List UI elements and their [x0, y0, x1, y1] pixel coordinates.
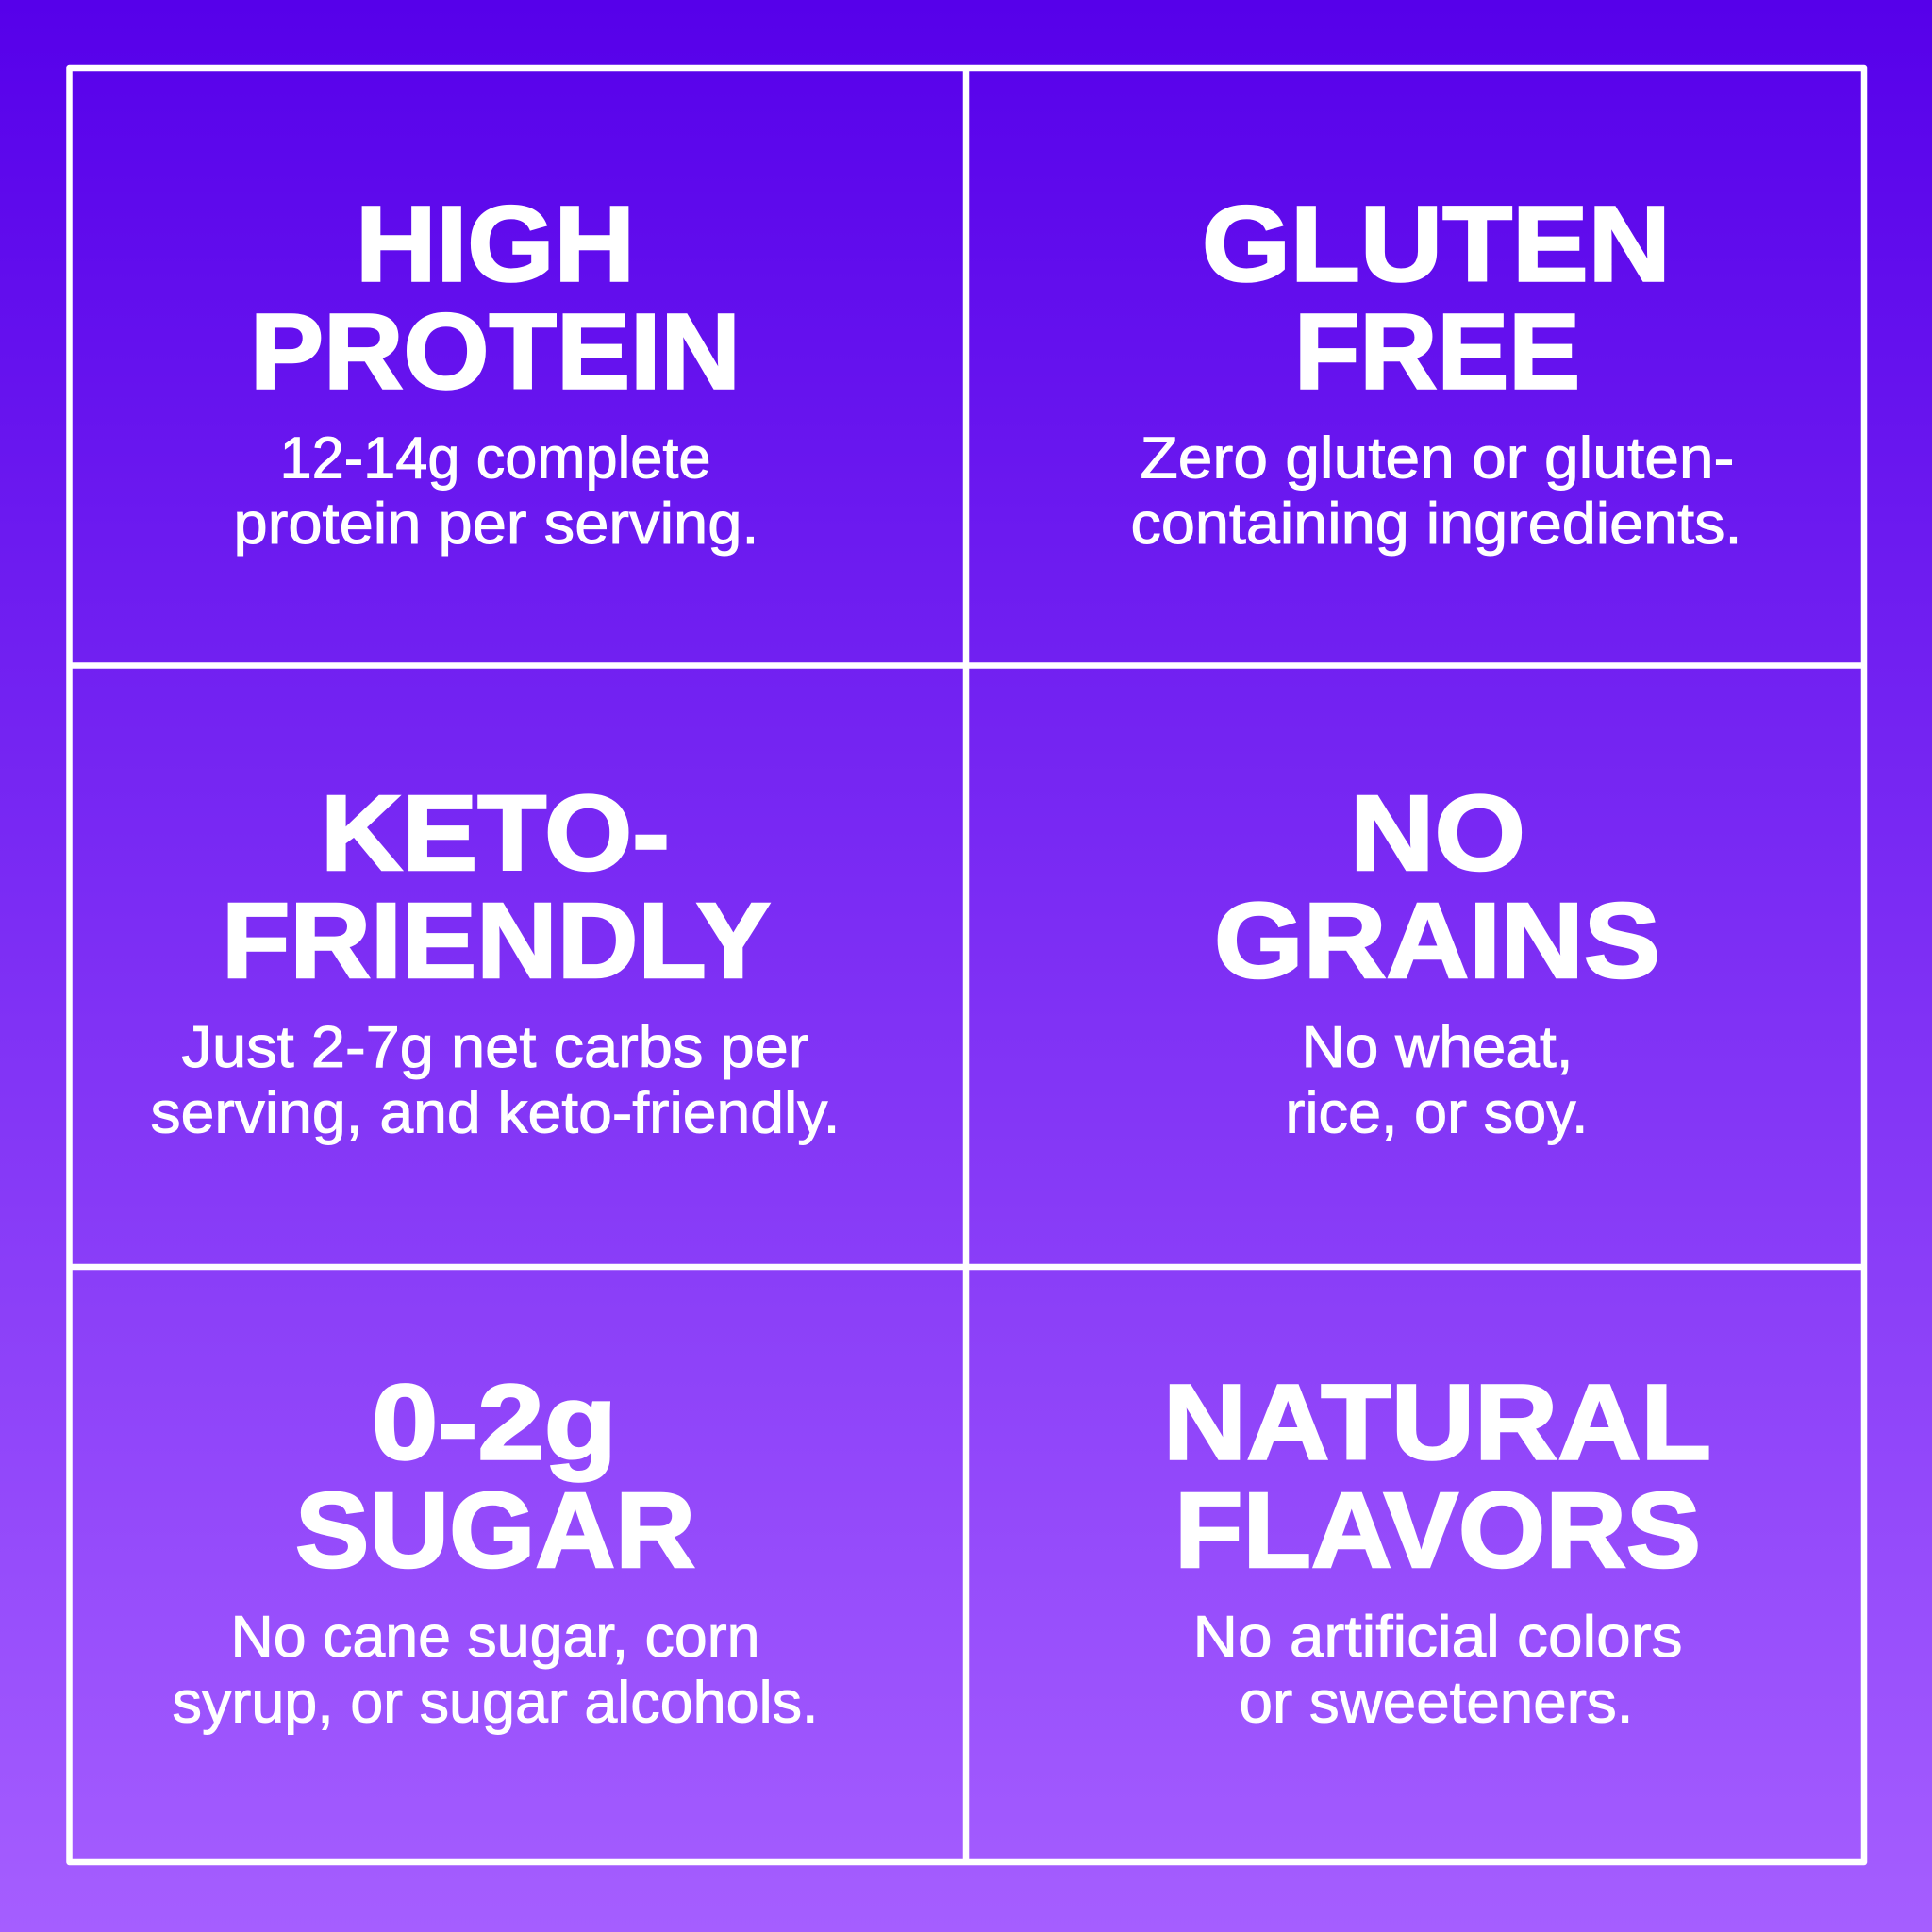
text: protein detail	[234, 426, 758, 557]
heading: high protein	[250, 185, 741, 411]
text: sugar detail: syrup, or sugar alcohols.	[172, 1670, 819, 1736]
panel: high protein	[72, 71, 963, 663]
heading: keto friendly: KETO-	[321, 774, 670, 892]
heading: high protein: PROTEIN	[250, 292, 741, 411]
heading: keto friendly	[222, 774, 771, 1000]
heading: gluten free: GLUTEN	[1202, 185, 1671, 304]
text: gluten detail: Zero gluten or gluten-	[1140, 426, 1734, 491]
text: flavors detail: No artificial colors	[1192, 1605, 1683, 1670]
text: gluten detail: containing ingredients.	[1130, 491, 1741, 557]
text: keto detail	[151, 1015, 840, 1145]
heading: gluten free	[1202, 185, 1671, 411]
text: gluten detail	[1130, 426, 1741, 557]
text: keto detail: Just 2-7g net carbs per	[181, 1015, 809, 1080]
text: grains detail: No wheat,	[1302, 1015, 1574, 1080]
heading: low sugar: 0-2g	[372, 1363, 617, 1482]
text: grains detail	[1285, 1015, 1589, 1145]
text: protein detail: 12-14g complete	[279, 426, 711, 491]
text: flavors detail: or sweeteners.	[1240, 1670, 1634, 1736]
text: sugar detail: No cane sugar, corn	[230, 1605, 760, 1670]
heading: no grains: NO	[1350, 774, 1525, 892]
text: flavors detail	[1192, 1605, 1683, 1736]
heading: no grains	[1214, 774, 1660, 1000]
panel: gluten free	[969, 71, 1861, 663]
heading: keto friendly: FRIENDLY	[222, 881, 771, 1000]
text: grains detail: rice, or soy.	[1285, 1081, 1589, 1145]
heading: natural flavors	[1163, 1363, 1711, 1590]
heading: high protein: HIGH	[356, 185, 635, 304]
heading: natural flavors: FLAVORS	[1174, 1471, 1701, 1590]
heading: natural flavors: NATURAL	[1163, 1363, 1711, 1482]
text: sugar detail	[172, 1605, 819, 1736]
panel: low sugar	[72, 1270, 963, 1859]
heading: gluten free: FREE	[1294, 292, 1580, 411]
panel: no grains	[969, 668, 1861, 1264]
heading: low sugar	[295, 1363, 695, 1590]
text: protein detail: protein per serving.	[234, 491, 758, 557]
heading: low sugar: SUGAR	[295, 1471, 695, 1590]
panel: natural flavors	[969, 1270, 1861, 1859]
heading: no grains: GRAINS	[1214, 881, 1660, 1000]
text: keto detail: serving, and keto-friendly.	[151, 1081, 840, 1145]
panel: keto friendly	[72, 668, 963, 1264]
